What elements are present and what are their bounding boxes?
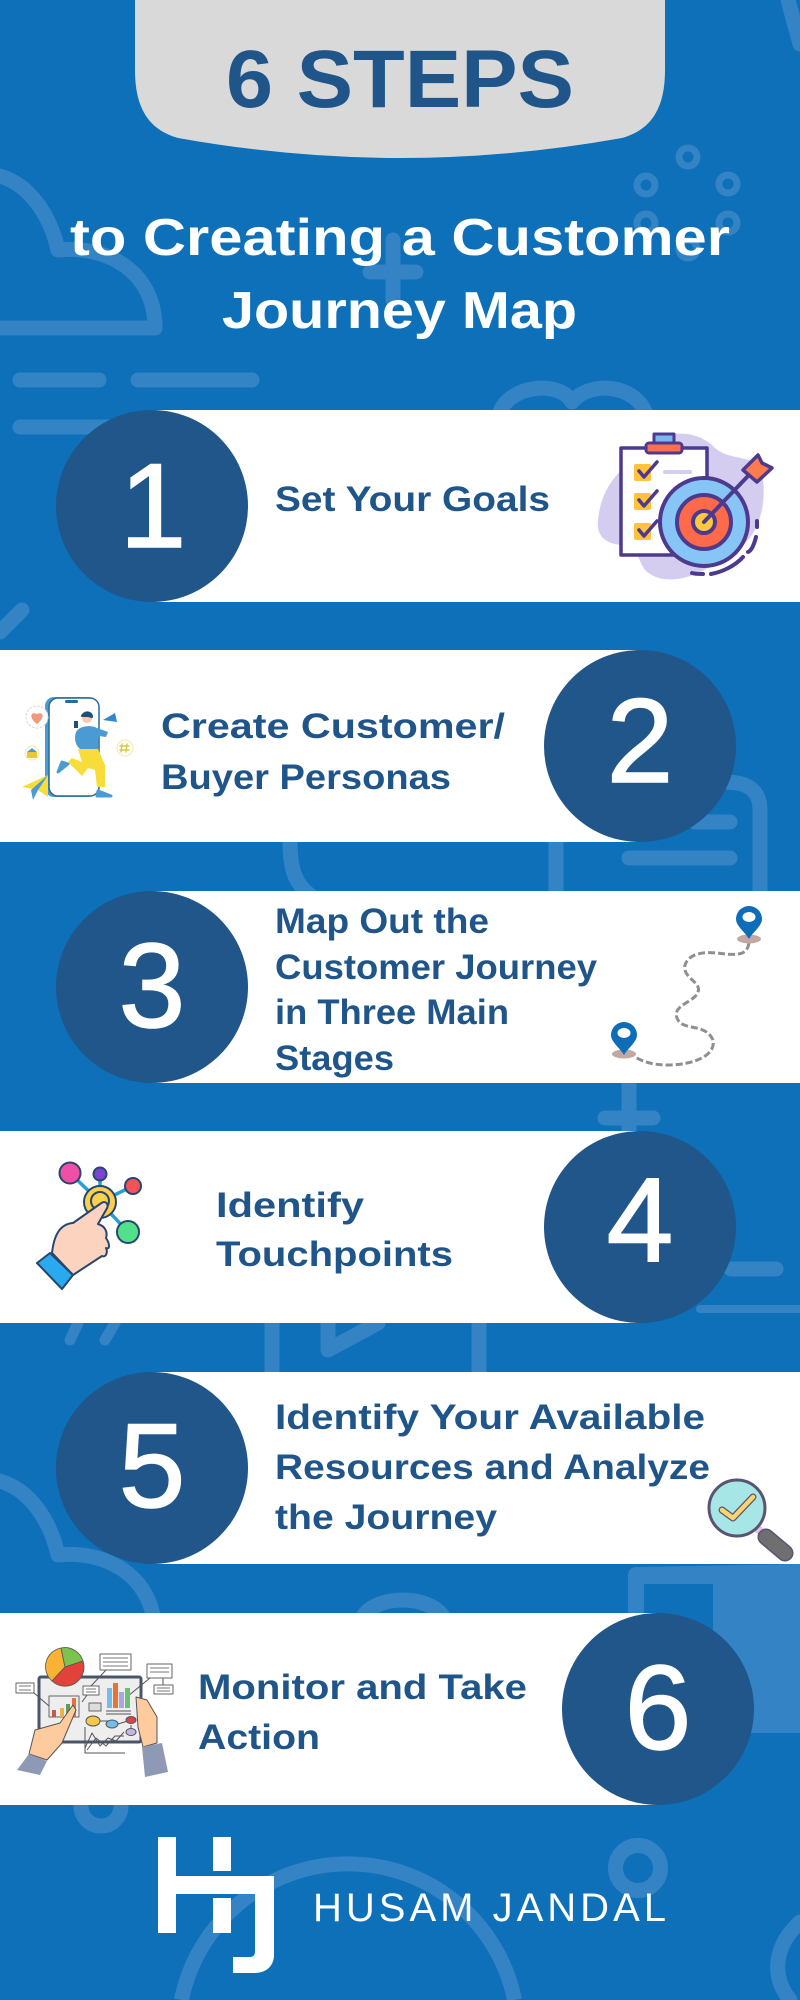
- step 4 number badge: [544, 1131, 736, 1323]
- step 4 text: Identify: [216, 1186, 365, 1225]
- panel: step 3: [56, 891, 800, 1083]
- step 1 text: Set Your Goals: [275, 480, 550, 519]
- step 4 number badge: 4: [607, 1153, 673, 1287]
- panel: step 4: [0, 1131, 736, 1323]
- icon: hand touching network: [37, 1162, 141, 1289]
- step 3 text: in Three Main: [275, 993, 509, 1032]
- panel: step 1: [56, 410, 800, 602]
- subtitle: Journey Map: [222, 282, 577, 340]
- step 5 number badge: 5: [119, 1399, 185, 1533]
- panel: step 6: [0, 1613, 754, 1805]
- step 6 text: Action: [198, 1718, 320, 1757]
- step 1 number badge: 1: [120, 439, 186, 573]
- step 2 number badge: [544, 650, 736, 842]
- step 4 text: Touchpoints: [216, 1235, 453, 1274]
- step 1 number badge: [56, 410, 248, 602]
- step 5 text: the Journey: [275, 1498, 498, 1537]
- step 2 number badge: 2: [607, 674, 673, 808]
- step 3 text: [275, 902, 598, 1078]
- step 3 number badge: 3: [119, 919, 185, 1053]
- title panel: [135, 0, 665, 158]
- step 5 text: Identify Your Available: [275, 1398, 705, 1437]
- step 3 text: Customer Journey: [275, 948, 598, 987]
- icon: tablet dashboard with hands: [16, 1648, 173, 1777]
- step 3 text: Stages: [275, 1039, 394, 1078]
- icon: magnifier with check: [709, 1480, 785, 1553]
- logo text: HUSAM JANDAL: HUSAM JANDAL: [313, 1886, 666, 1930]
- title: 6 STEPS: 6 STEPS: [226, 34, 574, 125]
- icon: map route with pins: [611, 906, 762, 1065]
- step 2 text: Buyer Personas: [161, 758, 451, 797]
- step 6 text: Monitor and Take: [198, 1668, 527, 1707]
- step 4 text: [216, 1186, 453, 1274]
- step 6 text: [198, 1668, 527, 1757]
- step 2 text: [161, 707, 505, 797]
- subtitle: [70, 209, 730, 340]
- panel: step 2: [0, 650, 736, 842]
- icon: clipboard and target: [598, 434, 772, 579]
- panel: step 5: [56, 1372, 800, 1564]
- step 6 number badge: [562, 1613, 754, 1805]
- subtitle: to Creating a Customer: [70, 209, 730, 267]
- icon: phone marketer: [22, 697, 133, 800]
- step 5 text: Resources and Analyze: [275, 1448, 710, 1487]
- logo: HJ monogram: [158, 1837, 274, 1973]
- step 3 number badge: [56, 891, 248, 1083]
- step 6 number badge: 6: [625, 1641, 691, 1775]
- step 5 text: [275, 1398, 710, 1537]
- step 3 text: Map Out the: [275, 902, 489, 941]
- step 5 number badge: [56, 1372, 248, 1564]
- step 2 text: Create Customer/: [161, 707, 505, 746]
